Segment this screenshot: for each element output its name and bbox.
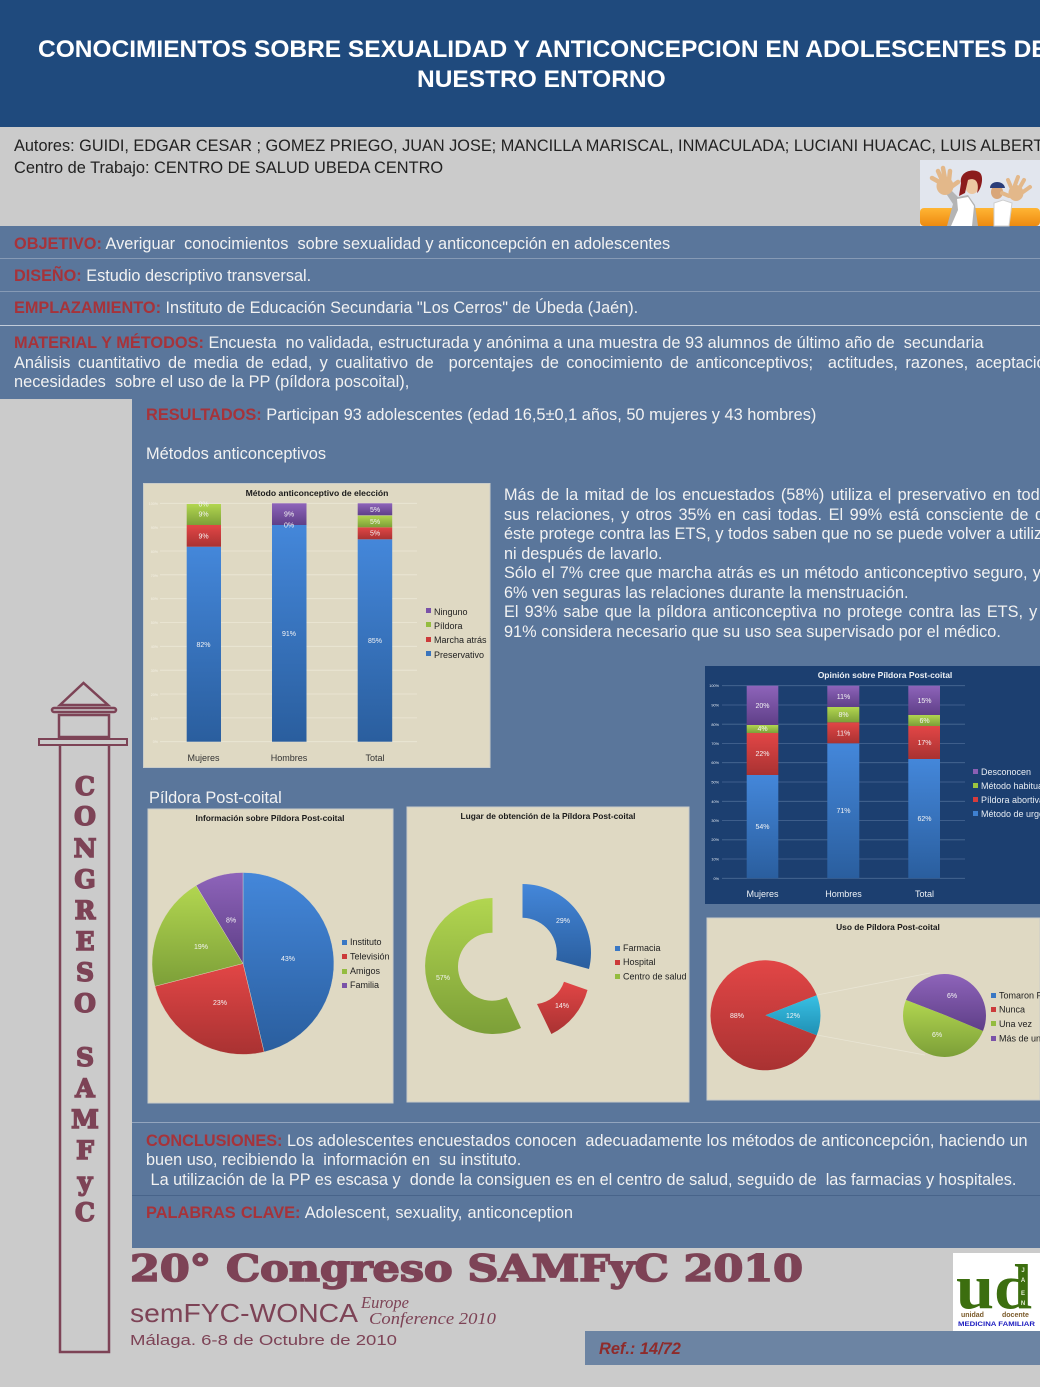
bar: Mujeres: 4%	[757, 726, 768, 733]
chart: opinion on emergency pill: 0%	[714, 877, 720, 881]
legend: Amigos	[350, 966, 381, 976]
findings paragraph: 91% considera necesario que su uso sea supervisado por el médico.	[504, 622, 1001, 640]
category labels	[746, 889, 934, 899]
chart: contraceptive method of choice: 10%	[151, 717, 159, 721]
keywords band	[132, 1196, 1040, 1248]
legend	[426, 607, 487, 660]
findings paragraph: 6% ven seguras las relaciones durante la menstruación.	[504, 584, 909, 602]
authors block	[0, 127, 1040, 226]
medicina familiar label: MEDICINA FAMILIAR	[958, 1321, 1035, 1328]
bar: Total: 5%	[370, 530, 380, 538]
vertical letters: C	[75, 1198, 95, 1227]
chart: opinion on emergency pill: 70%	[711, 742, 720, 746]
legend: Una vez	[999, 1019, 1033, 1029]
vertical letters: E	[75, 927, 95, 956]
chart: contraceptive method of choice: 90%	[151, 526, 159, 530]
findings paragraph: El 93% sabe que la píldora anticonceptiva no protege contra las ETS, y el	[504, 603, 1040, 621]
conference suffix	[360, 1293, 497, 1328]
contraceptive methods heading: Métodos anticonceptivos	[146, 445, 326, 463]
vertical letters: N	[74, 834, 96, 863]
chart: opinion on emergency pill	[705, 666, 1040, 904]
conclusions line 2: buen uso, recibiendo la información en su instituto.	[146, 1151, 521, 1169]
results panel	[132, 399, 1040, 1122]
bar: Mujeres	[187, 502, 221, 742]
congress footer wordmark	[130, 1248, 803, 1349]
chart: opinion on emergency pill: 90%	[711, 704, 720, 708]
congress name: 20° Congreso SAMFyC 2010	[130, 1248, 803, 1290]
legend: Píldora	[434, 621, 463, 631]
tower graphic with vertical congress text	[39, 683, 127, 1352]
bar: Hombres: 0%	[284, 522, 294, 530]
methods line 1: MATERIAL Y MÉTODOS: Encuesta no validada, estructurada y anónima a una muestra de 93 alumnos de último año de secundaria	[14, 334, 984, 352]
results intro: RESULTADOS: Participan 93 adolescentes (edad 16,5±0,1 años, 50 mujeres y 43 hombres)	[146, 406, 816, 424]
conference suffix: Europe	[360, 1293, 409, 1312]
jaen letters: N	[1021, 1301, 1025, 1307]
chart: information about emergency pill (pie)	[148, 809, 393, 1103]
conclusions band	[132, 1122, 1040, 1196]
pie	[152, 872, 334, 1054]
illustration: two waving figures	[920, 160, 1040, 226]
vertical letters: C	[75, 772, 95, 801]
chart: contraceptive method of choice: 20%	[151, 693, 159, 697]
bar: Hombres	[827, 686, 859, 878]
tower outline	[39, 683, 127, 1352]
reference number box	[585, 1331, 1040, 1365]
chart title: Opinión sobre Píldora Post-coital	[818, 670, 952, 680]
chart: contraceptive method of choice: 100%	[149, 502, 159, 506]
bar: Total: 15%	[917, 698, 932, 705]
legend: Hospital	[623, 957, 656, 967]
venue and dates: Málaga. 6-8 de Octubre de 2010	[130, 1332, 397, 1349]
vertical letters: S	[76, 1043, 94, 1072]
chart: where the pill was obtained (exploded donut): 29%	[556, 918, 570, 925]
category labels: Hombres	[271, 753, 308, 763]
legend	[615, 943, 687, 982]
design text: DISEÑO: Estudio descriptivo transversal.	[14, 267, 311, 285]
main pie: 12%	[786, 1013, 800, 1020]
setting band	[0, 292, 1040, 326]
chart: opinion on emergency pill: 20%	[711, 838, 720, 842]
legend	[991, 990, 1040, 1044]
vertical letters: M	[71, 1105, 99, 1134]
bar: Mujeres: 0%	[198, 502, 209, 508]
category labels: Total	[365, 753, 385, 763]
conclusions line 1: CONCLUSIONES: Los adolescentes encuestados conocen adecuadamente los métodos de anticoncepción, haciendo un	[146, 1132, 1028, 1150]
bar: Mujeres	[747, 686, 778, 878]
legend	[973, 767, 1040, 819]
jaen letters: A	[1021, 1278, 1026, 1284]
legend: Farmacia	[623, 943, 661, 953]
chart: contraceptive method of choice: 60%	[151, 597, 159, 601]
workplace: Centro de Trabajo: CENTRO DE SALUD UBEDA CENTRO	[14, 159, 443, 177]
category labels: Total	[915, 889, 934, 899]
chart: information about emergency pill (pie): 43%	[281, 956, 295, 963]
legend: Desconocen	[981, 767, 1031, 777]
chart: contraceptive method of choice: 30%	[151, 669, 159, 673]
chart: where the pill was obtained (exploded donut): 14%	[555, 1003, 569, 1010]
bar: Mujeres: 9%	[198, 534, 209, 540]
conference name: semFYC-WONCA	[130, 1298, 359, 1328]
findings paragraph: ni después de lavarlo.	[504, 544, 662, 562]
bar: Total: 6%	[919, 718, 930, 725]
chart: contraceptive method of choice: 50%	[151, 621, 159, 625]
chart: opinion on emergency pill: 10%	[711, 858, 720, 862]
bar: Hombres: 9%	[284, 512, 294, 518]
category labels: Mujeres	[187, 753, 220, 763]
bar: Hombres: 11%	[837, 730, 850, 738]
bar: Total	[358, 503, 392, 742]
logo: unidad docente	[953, 1251, 1040, 1331]
woman figure	[932, 168, 982, 226]
vertical letters: y	[77, 1167, 94, 1196]
objective text: OBJETIVO: Averiguar conocimientos sobre sexualidad y anticoncepción en adolescentes	[14, 235, 670, 253]
donut segments	[425, 884, 591, 1034]
chart: contraceptive method of choice: 70%	[151, 574, 159, 578]
jaen letters: E	[1021, 1291, 1025, 1297]
vertical letters: S	[76, 958, 94, 987]
emergency pill heading: Píldora Post-coital	[149, 789, 282, 807]
unidad docente label	[961, 1312, 1029, 1319]
unidad docente label: unidad	[961, 1312, 984, 1319]
chart: information about emergency pill (pie): 19%	[194, 944, 208, 951]
secondary pie: 6%	[947, 993, 957, 1000]
vertical letters: G	[74, 865, 96, 894]
secondary pie: 6%	[932, 1032, 942, 1039]
title line 1: CONOCIMIENTOS SOBRE SEXUALIDAD Y ANTICONCEPCION EN ADOLESCENTES DE	[38, 36, 1040, 63]
bar: Total	[908, 686, 940, 878]
chart: contraceptive method of choice: 0%	[153, 740, 159, 744]
unidad docente label: docente	[1002, 1312, 1029, 1319]
materials and methods band	[0, 326, 1040, 399]
keywords text: PALABRAS CLAVE: Adolescent, sexuality, anticonception	[146, 1204, 573, 1222]
chart: opinion on emergency pill: 30%	[711, 819, 720, 823]
legend: Nunca	[999, 1004, 1025, 1014]
chart title: Uso de Píldora Post-coital	[836, 922, 940, 932]
chart: contraceptive method of choice: 80%	[151, 550, 159, 554]
legend: Ninguno	[434, 607, 468, 617]
chart: where the pill was obtained (exploded donut): 57%	[436, 975, 450, 982]
bar: Total: 85%	[368, 638, 382, 645]
jaen letters	[1021, 1268, 1026, 1307]
main pie	[710, 960, 820, 1070]
bar: Total: 17%	[917, 740, 932, 747]
chart: opinion on emergency pill: 60%	[711, 761, 720, 765]
ud letters: ud	[956, 1251, 1032, 1322]
setting text: EMPLAZAMIENTO: Instituto de Educación Secundaria "Los Cerros" de Úbeda (Jaén).	[14, 299, 638, 317]
vertical letters: O	[74, 989, 96, 1018]
chart: information about emergency pill (pie): 8%	[226, 918, 236, 924]
conference suffix: Conference 2010	[369, 1309, 497, 1328]
vertical letters: R	[75, 896, 96, 925]
main pie: 88%	[730, 1013, 744, 1020]
bar: Mujeres: 82%	[196, 642, 211, 649]
chart: opinion on emergency pill: 40%	[711, 800, 720, 804]
vertical letters: A	[74, 1074, 95, 1103]
chart: use of emergency pill (pie of pie)	[707, 918, 1040, 1100]
vertical letters: F	[76, 1136, 94, 1165]
authors: Autores: GUIDI, EDGAR CESAR ; GOMEZ PRIEGO, JUAN JOSE; MANCILLA MARISCAL, INMACULADA; LUCIANI HUACAC, LUIS ALBERTO	[14, 137, 1040, 155]
category labels: Mujeres	[746, 889, 779, 899]
chart: contraceptive method of choice: 40%	[151, 645, 159, 649]
methods line 3: necesidades sobre el uso de la PP (píldora poscoital),	[14, 373, 409, 391]
chart: where the pill was obtained (exploded donut)	[407, 807, 689, 1102]
chart: opinion on emergency pill: 50%	[711, 780, 720, 784]
legend: Centro de salud	[623, 972, 687, 982]
objective band	[0, 226, 1040, 259]
bar: Hombres: 91%	[282, 631, 296, 638]
bar: Mujeres: 54%	[755, 824, 770, 831]
bar: Total: 5%	[370, 519, 380, 526]
bar: Hombres: 11%	[837, 694, 850, 701]
man figure	[990, 177, 1030, 226]
chart: opinion on emergency pill: 100%	[709, 684, 720, 688]
legend: Marcha atrás	[434, 635, 487, 645]
chart title: Información sobre Píldora Post-coital	[196, 813, 344, 823]
legend: Familia	[350, 980, 379, 990]
chart: contraceptive method of choice	[144, 484, 490, 768]
bar: Hombres: 71%	[836, 808, 851, 815]
title line 2: NUESTRO ENTORNO	[417, 66, 666, 93]
vertical letters	[71, 772, 99, 1227]
legend	[342, 937, 390, 990]
vertical letters: O	[74, 802, 96, 831]
design band	[0, 259, 1040, 292]
category labels: Hombres	[825, 889, 862, 899]
bar: Total: 5%	[370, 507, 380, 514]
bar: Mujeres: 20%	[755, 703, 770, 710]
legend: Instituto	[350, 937, 382, 947]
header banner with title	[0, 0, 1040, 127]
category labels	[187, 753, 385, 763]
bar: Mujeres: 22%	[755, 751, 770, 758]
chart: information about emergency pill (pie): 23%	[213, 1000, 227, 1007]
legend: Preservativo	[434, 650, 484, 660]
bar: Hombres	[272, 503, 306, 742]
jaen letters: J	[1021, 1268, 1025, 1274]
reference text: Ref.: 14/72	[599, 1340, 681, 1358]
bar: Hombres: 8%	[838, 712, 849, 719]
chart title: Lugar de obtención de la Píldora Post-coital	[461, 811, 635, 821]
methods line 2: Análisis cuantitativo de media de edad, y cualitativo de porcentajes de conocimiento de anticonceptivos; actitudes, razones, aceptación	[14, 354, 1040, 372]
bar: Total: 62%	[917, 816, 932, 823]
chart: opinion on emergency pill: 80%	[711, 723, 720, 727]
chart title: Método anticonceptivo de elección	[246, 488, 388, 498]
findings paragraph	[504, 486, 1040, 640]
legend: Televisión	[350, 952, 390, 962]
bar: Mujeres: 9%	[198, 512, 209, 518]
conclusions line 3: La utilización de la PP es escasa y donde la consiguen es en el centro de salud, seguido de las farmacias y hospitales.	[151, 1171, 1016, 1189]
secondary pie	[903, 974, 986, 1057]
